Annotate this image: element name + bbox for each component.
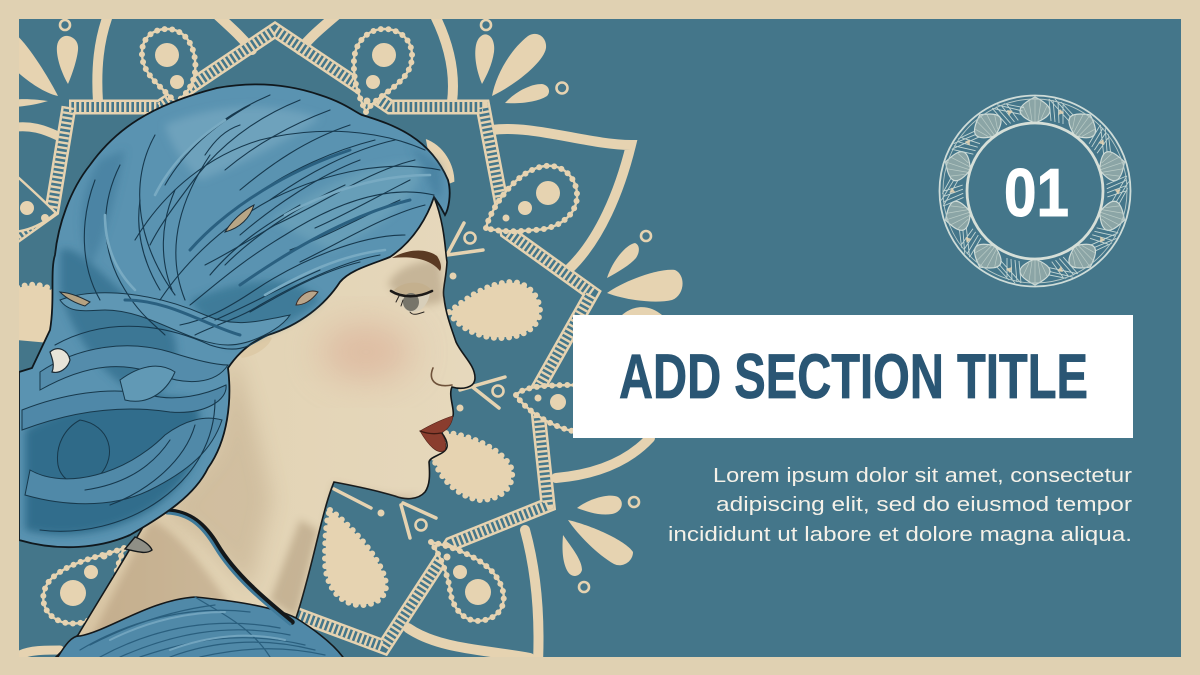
dress strap: [125, 511, 292, 624]
body text: Lorem ipsum dolor sit amet, consectetur: [713, 465, 1132, 487]
ornamental ring: [933, 91, 1137, 291]
hair accents: [225, 205, 254, 232]
body text: [668, 465, 1132, 546]
hair: [19, 84, 450, 547]
title box: [573, 315, 1133, 438]
nostril: [431, 368, 452, 386]
skin shading: [90, 258, 444, 640]
illustration: woman in profile: [19, 84, 475, 660]
hair strands: light ribbons: [105, 120, 430, 295]
skin: face, neck and shoulder: [56, 197, 475, 657]
mandala solid teardrops: [10, 30, 683, 576]
hair light patches: [165, 107, 425, 250]
body text: incididunt ut labore et dolore magna aliqua.: [668, 524, 1132, 546]
eyebrow: [392, 250, 441, 271]
mandala ornament: [10, 10, 683, 662]
mandala petal arcs: [10, 10, 650, 662]
dress: [56, 597, 345, 660]
body text: adipiscing elit, sed do eiusmod tempor: [716, 494, 1132, 516]
eye: [391, 283, 432, 314]
medallion number badge: [933, 91, 1137, 291]
mandala paisley petals: [10, 29, 580, 623]
mandala hatched star outline: [10, 30, 592, 647]
mandala rings and dots: [60, 20, 651, 592]
ear: [240, 336, 272, 358]
hair ribbons: [22, 293, 290, 504]
hair strands: thick dark: [125, 150, 410, 335]
hair dark patches: [25, 145, 442, 535]
mandala solid scalloped drops: [10, 138, 540, 605]
section number: 01: [1004, 155, 1069, 231]
hair strands: fine dark: [40, 95, 440, 531]
hair mass: [19, 84, 450, 547]
lips: [420, 416, 453, 452]
